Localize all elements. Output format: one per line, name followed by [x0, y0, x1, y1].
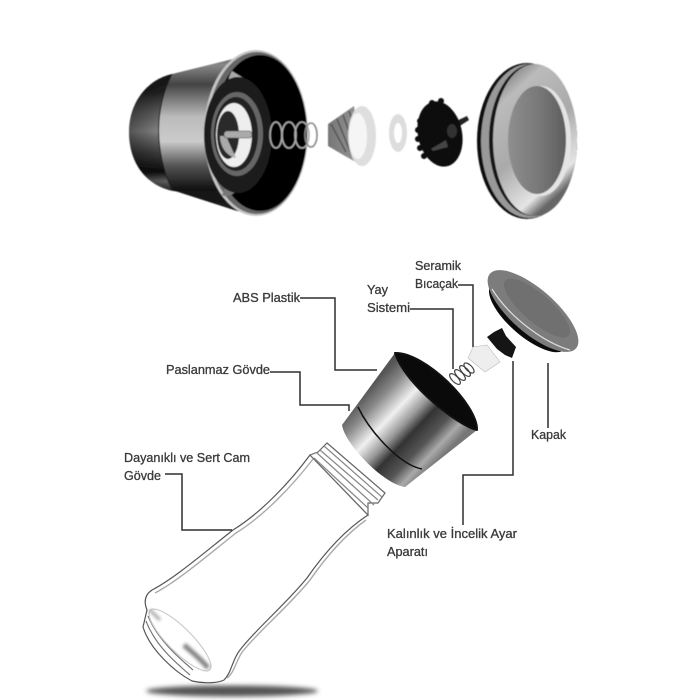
- bottom steel cup: [342, 353, 477, 487]
- label: Yay Sistemi: Yay: [367, 283, 389, 297]
- exploded view: lid: [477, 63, 577, 219]
- exploded view: ceramic blade: [328, 106, 376, 166]
- bottom glass jar: [142, 443, 385, 683]
- label: Seramik Bıcaçak: [415, 259, 473, 347]
- label: ABS Plastik: [233, 291, 377, 370]
- label: Dayanıklı ve Sert Cam Gövde: Dayanıklı ve Sert Cam: [124, 451, 250, 465]
- bottom ceramic blade: [468, 345, 500, 372]
- bottom adjustment knob: [487, 328, 516, 358]
- label: Kalınlık ve İncelik Ayar Aparatı: Kalınlık ve İncelik Ayar: [387, 527, 517, 541]
- label: Yay Sistemi: Sistemi: [367, 301, 410, 315]
- label: Kapak: Kapak: [531, 428, 567, 442]
- bottom spring: [448, 361, 476, 386]
- base shadow: [146, 686, 318, 696]
- bottom lid: [476, 257, 590, 365]
- label: Dayanıklı ve Sert Cam Gövde: [124, 451, 250, 530]
- label: Kapak: [531, 363, 567, 442]
- label: Yay Sistemi: [367, 283, 453, 369]
- label: Dayanıklı ve Sert Cam Gövde: Gövde: [124, 469, 161, 483]
- spring: [270, 122, 317, 148]
- exploded view: washer: [389, 114, 407, 152]
- exploded view: grinder housing: [129, 50, 317, 216]
- exploded view: adjustment knob: [412, 97, 469, 171]
- label: Seramik Bıcaçak: Seramik: [415, 259, 462, 273]
- label: Seramik Bıcaçak: Bıcaçak: [415, 277, 459, 291]
- label: ABS Plastik: ABS Plastik: [233, 291, 301, 305]
- label: Paslanmaz Gövde: Paslanmaz Gövde: [166, 363, 270, 377]
- label: Kalınlık ve İncelik Ayar Aparatı: Aparatı: [387, 545, 428, 559]
- label: Paslanmaz Gövde: [166, 363, 349, 411]
- label: Kalınlık ve İncelik Ayar Aparatı: [387, 361, 517, 559]
